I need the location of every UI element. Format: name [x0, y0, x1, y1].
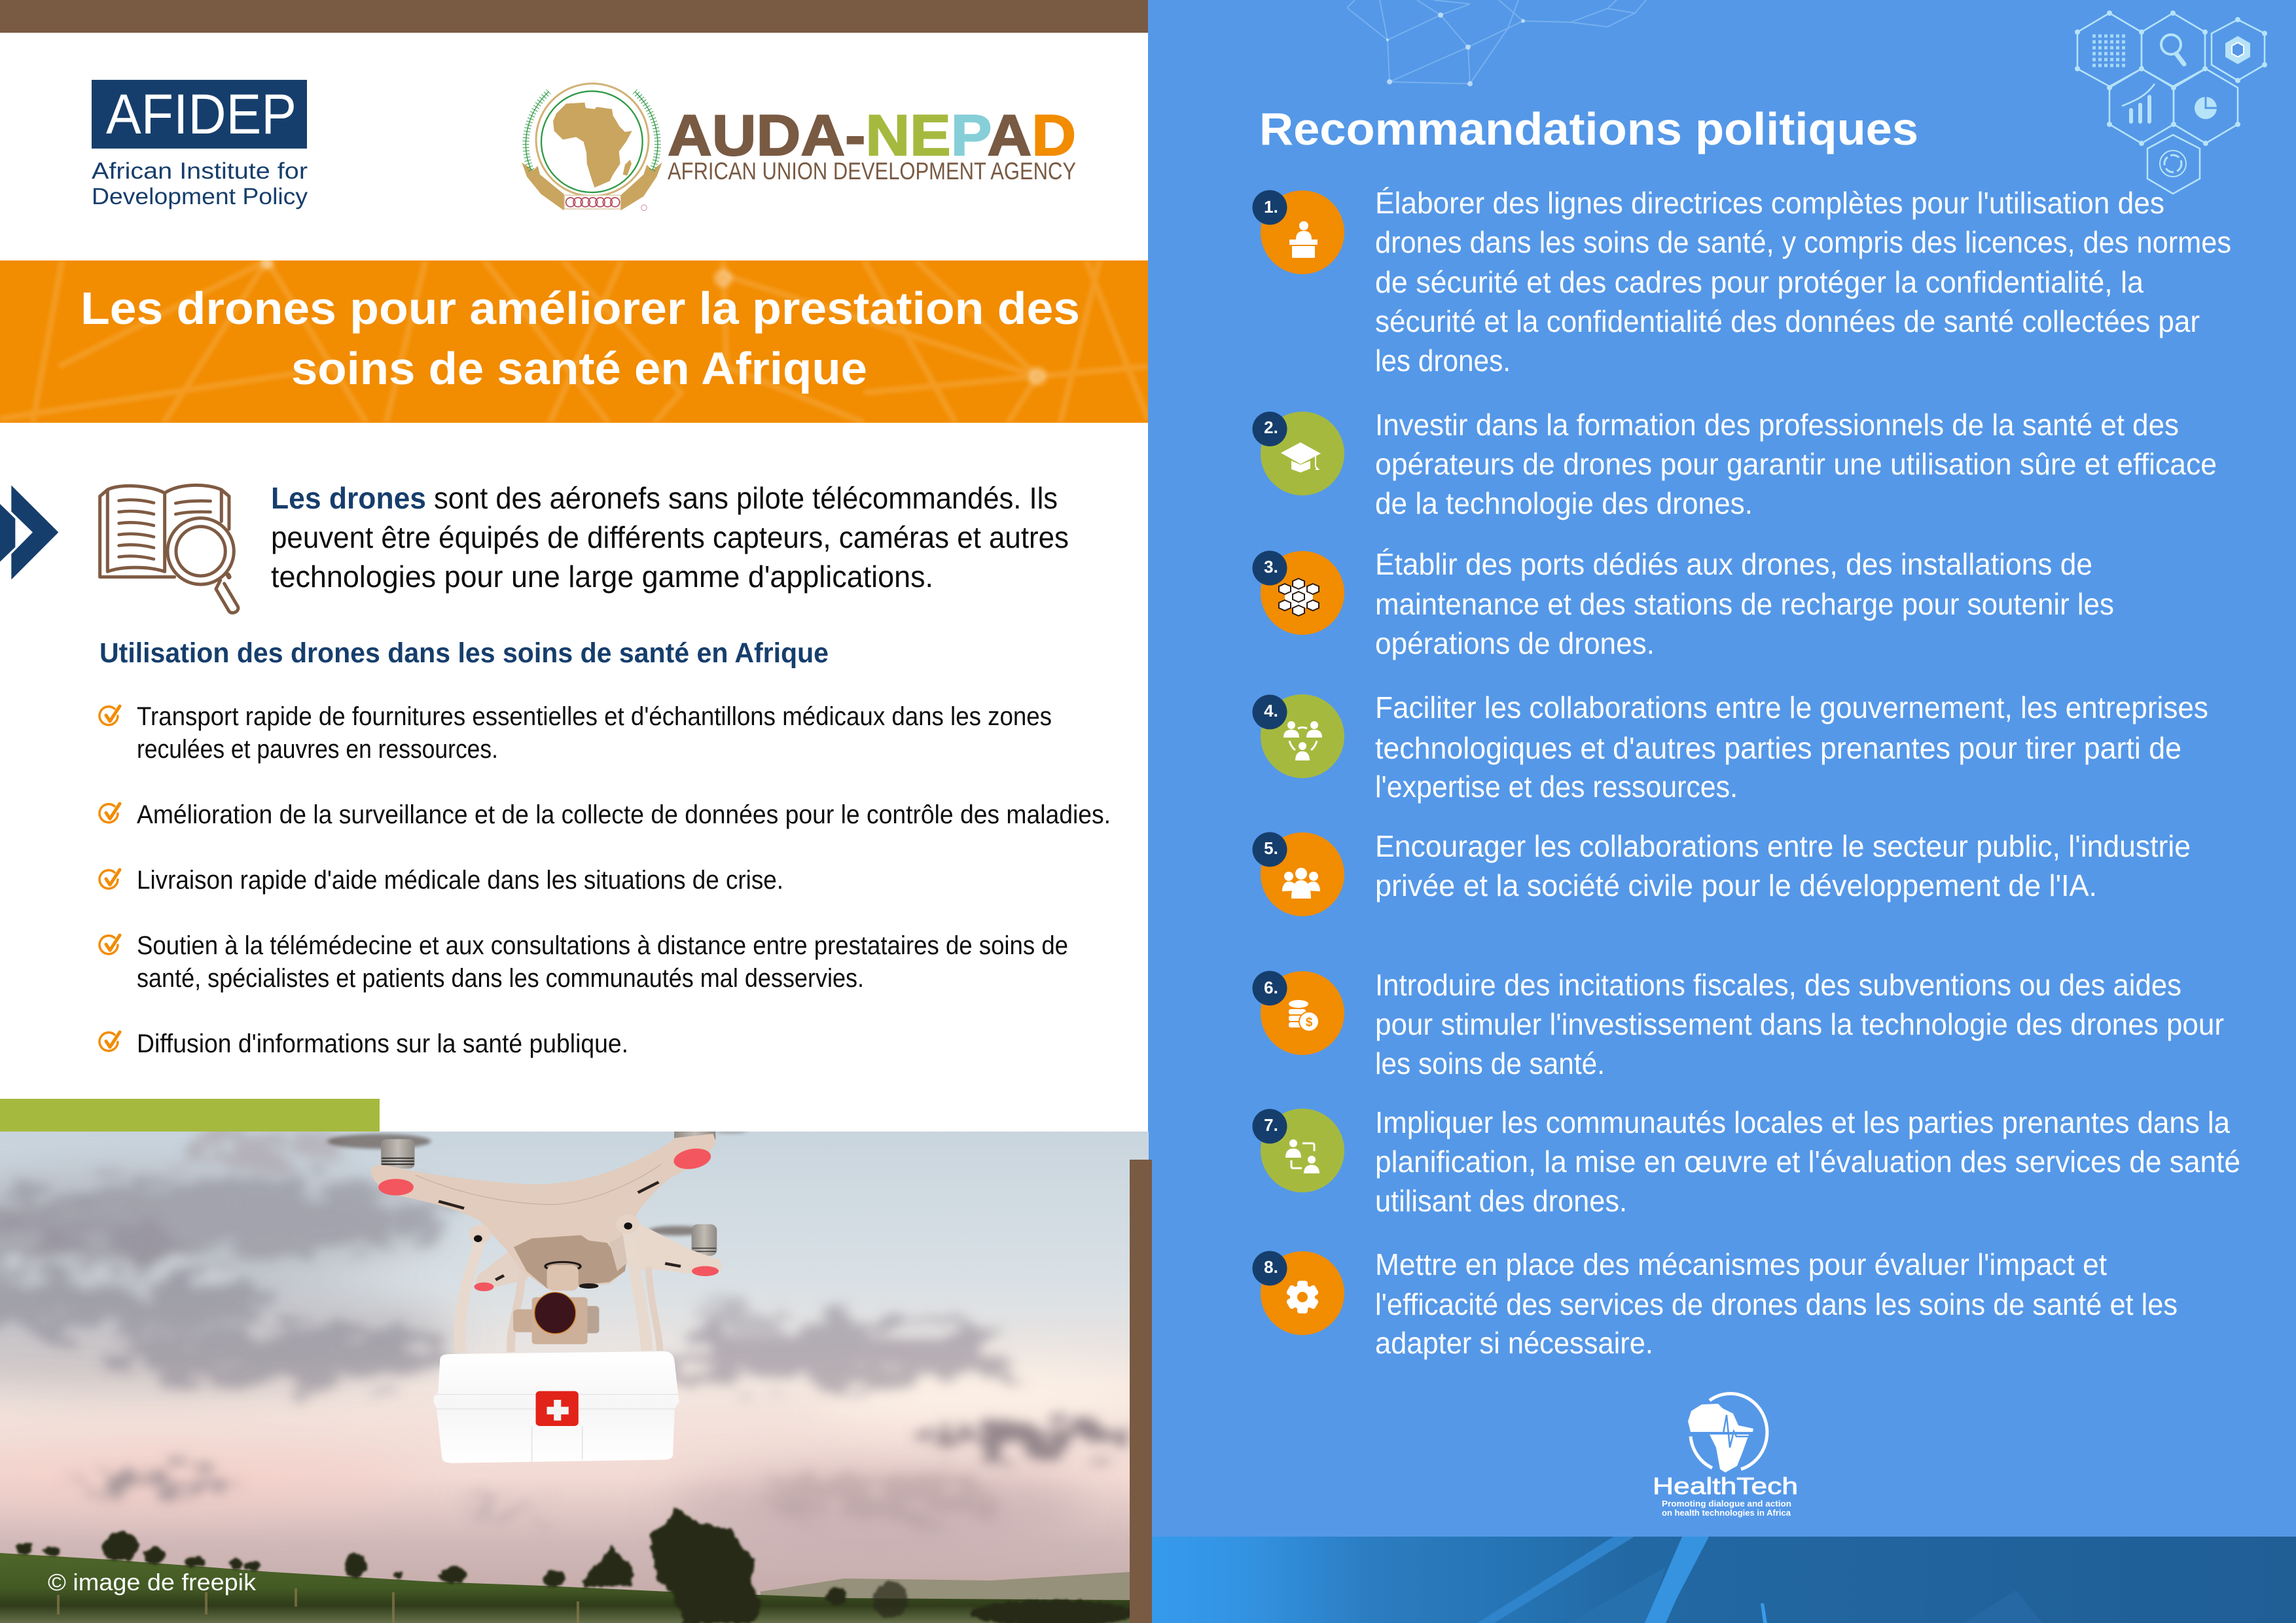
bullet 5: Diffusion d'informations sur la santé publique.: [137, 1029, 628, 1058]
title banner: soins de santé en Afrique: [291, 343, 867, 394]
panel: right blue column: [1148, 0, 2296, 1623]
logo: HealthTech: HealthTech: [1653, 1472, 1798, 1499]
vents: [439, 1182, 681, 1280]
icon: cube network: [1279, 579, 1319, 616]
icon: African Union emblem: [522, 84, 662, 211]
recommendation 2: de la technologie des drones.: [1375, 486, 1753, 520]
title banner: [0, 258, 1148, 423]
recommendation 3: maintenance et des stations de recharge pour soutenir les: [1375, 587, 2114, 621]
recommendation 1: Élaborer des lignes directrices complètes pour l'utilisation des: [1375, 186, 2164, 220]
recommendation 1: drones dans les soins de santé, y compris des licences, des normes: [1375, 225, 2231, 259]
recommendation 3: Établir des ports dédiés aux drones, des installations de: [1375, 547, 2092, 581]
icon: group of people: [1282, 868, 1320, 899]
camera: [513, 1310, 537, 1332]
photo: drone carrying medical box: [0, 1130, 1152, 1623]
recommendation 3: [1253, 547, 2114, 660]
recommendation 1: de sécurité et des cadres pour protéger la confidentialité, la: [1375, 265, 2144, 299]
icon: collaborating people: [1283, 721, 1322, 760]
panel: left white column: [0, 0, 1148, 1132]
recommendation 4: technologiques et d'autres parties prenantes pour tirer parti de: [1375, 731, 2181, 765]
recommendation 7: 7.: [1264, 1115, 1278, 1135]
recommendation 6: les soins de santé.: [1375, 1046, 1605, 1080]
recommendation 5: Encourager les collaborations entre le secteur public, l'industrie: [1375, 829, 2191, 863]
clouds: [0, 1135, 1152, 1544]
logo: HealthTech: [1653, 1393, 1798, 1518]
recommendation 8: Mettre en place des mécanismes pour évaluer l'impact et: [1375, 1247, 2107, 1281]
recommendation 8: adapter si nécessaire.: [1375, 1326, 1653, 1360]
logo: AUDA-NEPAD: AUDA-NEPAD: [668, 103, 1076, 168]
recommendation 7: planification, la mise en œuvre et l'évaluation des services de santé: [1375, 1145, 2240, 1179]
recommendation 2: 2.: [1264, 418, 1278, 437]
recommendation 4: [1253, 690, 2208, 804]
recommendation 6: pour stimuler l'investissement dans la technologie des drones pour: [1375, 1007, 2224, 1041]
recommendation 6: 6.: [1264, 978, 1278, 997]
fence posts: [58, 1588, 753, 1623]
bullet 4: [99, 931, 1068, 993]
icon: navy chevrons: [0, 486, 58, 580]
bullet 4: Soutien à la télémédecine et aux consultations à distance entre prestataires de soins de: [137, 931, 1068, 960]
bullet 1: reculées et pauvres en ressources.: [137, 735, 498, 764]
recommendation 8: l'efficacité des services de drones dans les soins de santé et les: [1375, 1287, 2178, 1321]
recommendation 7: Impliquer les communautés locales et les parties prenantes dans la: [1375, 1105, 2230, 1139]
icon: coins: [1289, 1000, 1319, 1031]
recommendation 2: Investir dans la formation des professionnels de la santé et des: [1375, 408, 2179, 442]
recommendation 5: privée et la société civile pour le développement de l'IA.: [1375, 868, 2097, 902]
intro text: peuvent être équipés de différents capteurs, caméras et autres: [271, 520, 1069, 554]
recommendation 3: opérations de drones.: [1375, 626, 1655, 660]
title banner: Les drones pour améliorer la prestation des: [81, 283, 1080, 334]
recommendation 6: [1253, 968, 2224, 1080]
distant hill: [761, 1572, 1130, 1600]
recommendation 4: Faciliter les collaborations entre le gouvernement, les entreprises: [1375, 690, 2208, 724]
recommendation 2: [1253, 408, 2217, 520]
icon: coins: $: [1306, 1016, 1313, 1029]
bottom blue band: [1152, 1537, 2296, 1623]
red lights: [378, 1179, 414, 1196]
legs: [459, 1228, 482, 1353]
bullet 1: Transport rapide de fournitures essentielles et d'échantillons médicaux dans les zones: [137, 702, 1052, 731]
recommendation 8: [1253, 1247, 2178, 1360]
bullet 4: santé, spécialistes et patients dans les communautés mal desservies.: [137, 964, 864, 993]
recommendation 8: 8.: [1264, 1257, 1278, 1277]
motors: [381, 1139, 414, 1169]
logo: AFIDEP: Development Policy: [92, 184, 308, 209]
logo: HealthTech: on health technologies in Africa: [1662, 1508, 1791, 1518]
drone: [327, 1130, 747, 1353]
logo: AFIDEP: African Institute for: [92, 158, 308, 184]
intro text: Les drones: [271, 481, 426, 515]
recommendation 5: [1253, 829, 2191, 916]
logo: AUDA-NEPAD: AFRICAN UNION DEVELOPMENT AGENCY: [668, 158, 1076, 185]
heading: policy recommendations: Recommandations politiques: [1259, 103, 1918, 154]
rotors: [327, 1134, 431, 1149]
logo: AUDA-NEPAD: [522, 84, 1076, 211]
recommendation 1: [1253, 186, 2231, 378]
top brown bar: [0, 0, 1148, 33]
bullet 3: Livraison rapide d'aide médicale dans les situations de crise.: [137, 866, 783, 895]
recommendation 5: 5.: [1264, 838, 1278, 858]
green accent bar: [0, 1099, 380, 1132]
icon: graduation cap: [1281, 442, 1321, 473]
icon: gear: [1285, 1281, 1319, 1313]
intro text: sont des aéronefs sans pilote télécommandés. Ils: [434, 481, 1058, 515]
icon: speaker at podium: [1289, 221, 1318, 258]
recommendation 4: l'expertise et des ressources.: [1375, 770, 1738, 804]
heading: uses of drones: Utilisation des drones dans les soins de santé en Afrique: [99, 637, 829, 669]
gimbal mount: [514, 1235, 626, 1289]
recommendation 2: opérateurs de drones pour garantir une utilisation sûre et efficace: [1375, 447, 2217, 481]
bullet 1: [99, 702, 1052, 764]
recommendation 3: 3.: [1264, 557, 1278, 577]
icon: hexagon technology cluster: [2075, 10, 2267, 194]
recommendation 1: sécurité et la confidentialité des données de santé collectées par: [1375, 304, 2200, 338]
image credit: © image de freepik: [48, 1569, 257, 1596]
intro text: [271, 481, 1069, 594]
trees: [16, 1507, 1136, 1623]
recommendation 7: utilisant des drones.: [1375, 1184, 1627, 1218]
recommendation 4: 4.: [1264, 701, 1278, 721]
bullet 2: Amélioration de la surveillance et de la collecte de données pour le contrôle des maladies.: [137, 800, 1111, 829]
recommendation 1: les drones.: [1375, 344, 1511, 378]
body: [371, 1133, 716, 1289]
icon: book and magnifier: [100, 485, 238, 613]
brown vertical bar: [1130, 1160, 1152, 1623]
logo: AFIDEP: AFIDEP: [106, 83, 296, 146]
far arms: [630, 1223, 722, 1275]
recommendation 1: 1.: [1264, 197, 1278, 217]
intro text: technologies pour une large gamme d'applications.: [271, 560, 933, 594]
icon: stakeholder exchange: [1285, 1139, 1319, 1173]
logo: HealthTech: Promoting dialogue and action: [1662, 1499, 1791, 1508]
recommendation 6: Introduire des incitations fiscales, des subventions ou des aides: [1375, 968, 2181, 1002]
medical box: [433, 1351, 679, 1463]
list: drone uses: [99, 702, 1111, 1058]
logo: AFIDEP: [92, 80, 308, 209]
ground: [0, 1553, 1131, 1623]
decoration: network lines top: [1347, 0, 1646, 86]
recommendation 7: [1253, 1105, 2240, 1218]
